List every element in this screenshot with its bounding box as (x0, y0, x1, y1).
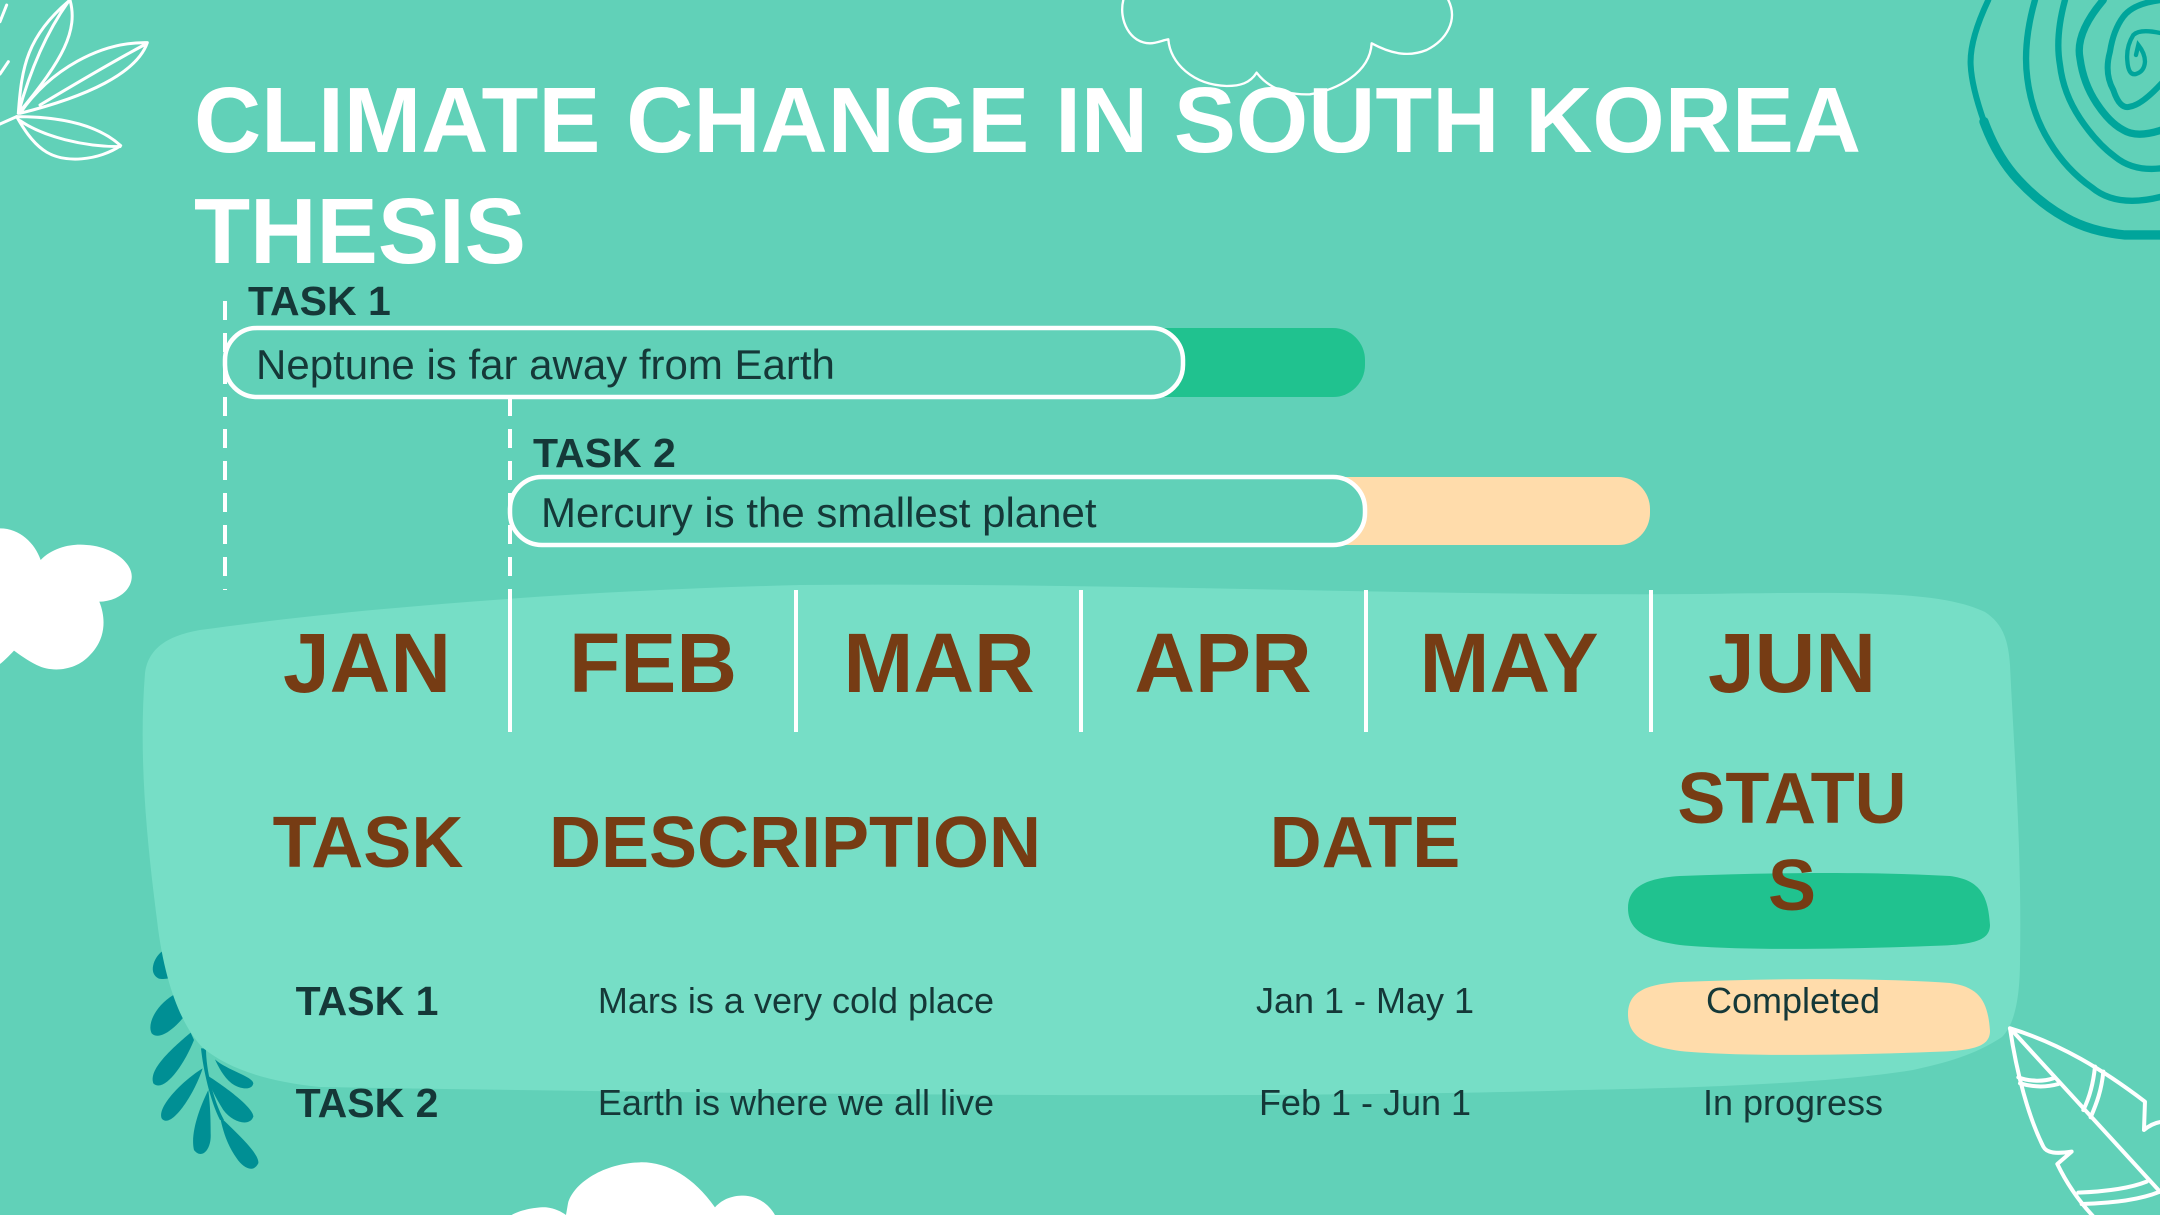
icon: white cloud left (0, 528, 132, 669)
table row: task 2: Feb 1 - Jun 1 (1259, 1082, 1471, 1123)
table row: task 1: Completed (1706, 980, 1880, 1021)
table row: task 2: Earth is where we all live (598, 1082, 994, 1123)
gantt bar: task 2: TASK 2 (533, 430, 676, 476)
icon: teal fern bottom left (150, 952, 258, 1169)
table row: task 2: TASK 2 (296, 1080, 438, 1126)
month separators (510, 590, 1651, 732)
icon: teal spiral top right (1971, 0, 2160, 235)
icon: outline cloud top (1122, 0, 1452, 94)
icon: outline feather bottom right (2010, 1028, 2160, 1215)
table header (273, 803, 1460, 883)
status header: S (1768, 846, 1816, 926)
status header (1677, 759, 1907, 926)
month labels: FEB (569, 616, 737, 710)
month labels: APR (1134, 616, 1312, 710)
table row: task 1: Mars is a very cold place (598, 980, 994, 1021)
gantt bar: task 2 (510, 430, 1650, 545)
icon: outline leaves top left (0, 0, 147, 159)
table row: task 1 (296, 978, 1880, 1024)
table row: task 1: Jan 1 - May 1 (1256, 980, 1474, 1021)
title: THESIS (194, 179, 526, 283)
status header: STATU (1677, 759, 1907, 839)
title (194, 68, 1861, 283)
table row: task 2: In progress (1703, 1082, 1883, 1123)
icon: white cloud bottom (512, 1162, 775, 1215)
table header: TASK (273, 803, 463, 883)
gantt bar: task 1: TASK 1 (248, 278, 391, 324)
month labels: MAR (843, 616, 1035, 710)
table row: task 2 (296, 1080, 1883, 1126)
table header: DATE (1270, 803, 1460, 883)
panel: timeline and table background (143, 585, 2020, 1095)
gantt start line task 2 (508, 397, 512, 590)
table row: task 1: TASK 1 (296, 978, 438, 1024)
gantt bar: task 1: Neptune is far away from Earth (256, 341, 835, 388)
month labels: MAY (1420, 616, 1598, 710)
month labels (283, 616, 1876, 710)
gantt bar: task 2: Mercury is the smallest planet (541, 489, 1097, 536)
month labels: JUN (1708, 616, 1876, 710)
gantt bar: task 1 (225, 278, 1365, 397)
title: CLIMATE CHANGE IN SOUTH KOREA (194, 68, 1861, 172)
table header: DESCRIPTION (549, 803, 1041, 883)
gantt start line task 1 (223, 301, 227, 590)
status pill: peach (1628, 979, 1990, 1055)
month labels: JAN (283, 616, 451, 710)
status pill: green (1628, 873, 1990, 949)
